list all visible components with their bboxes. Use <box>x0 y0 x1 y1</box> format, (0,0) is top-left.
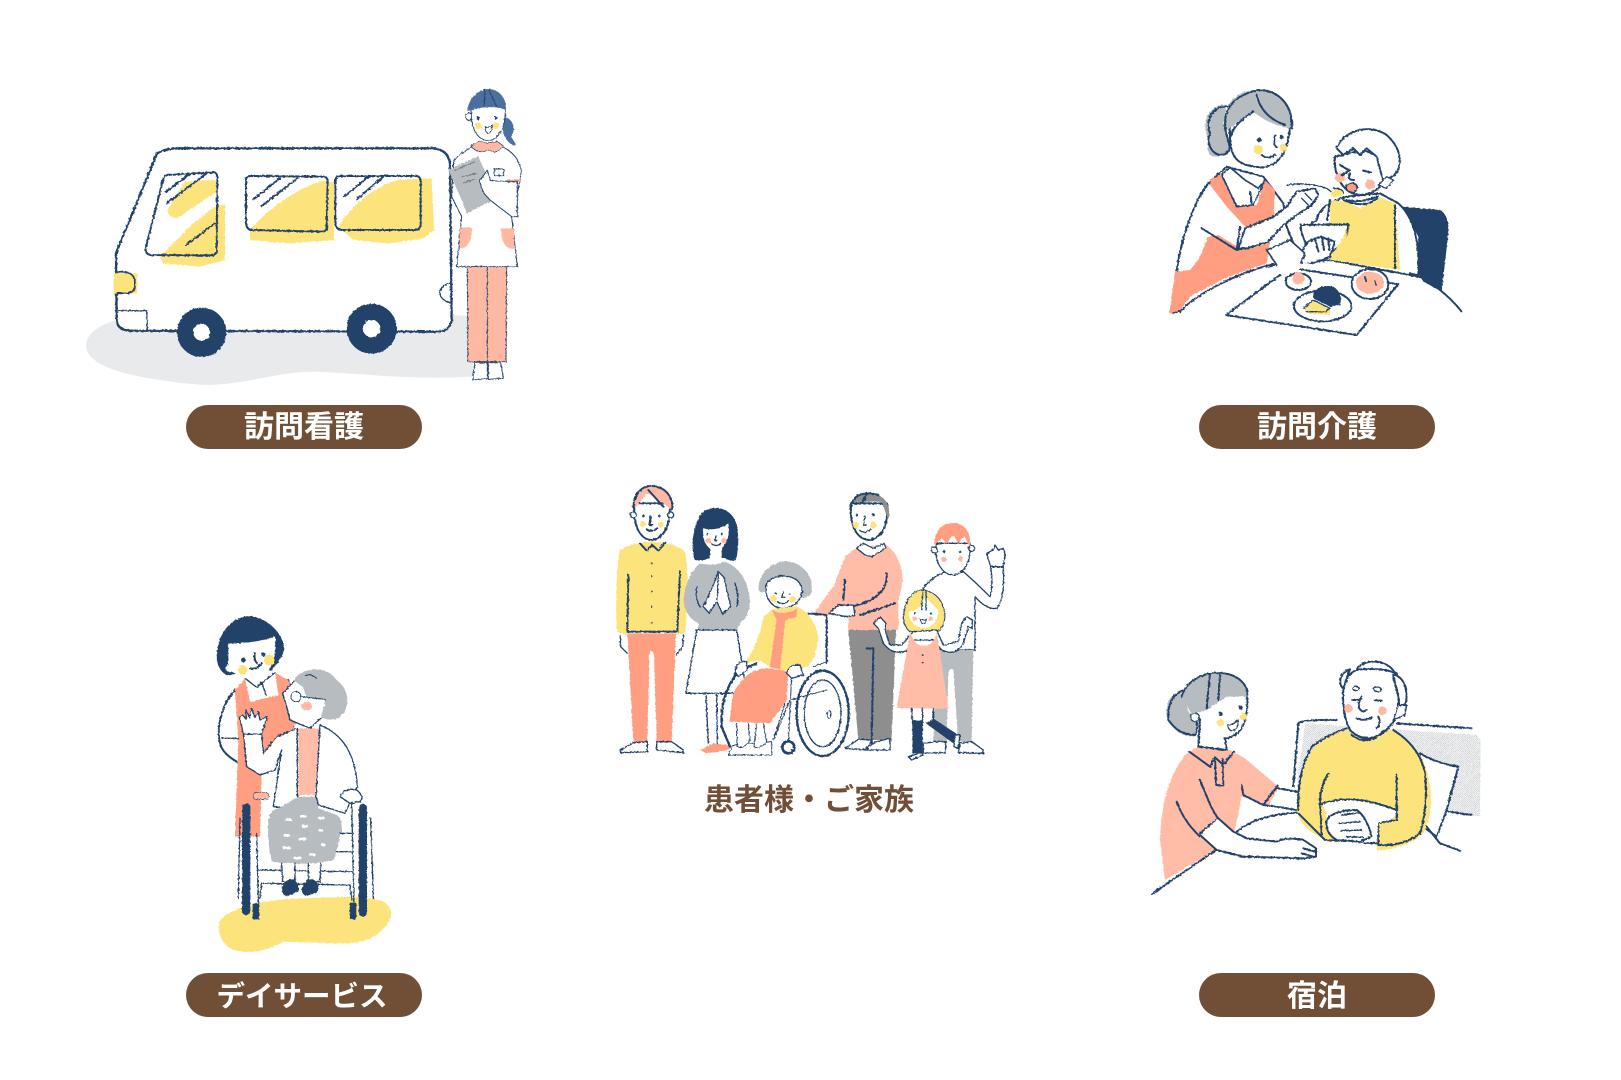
illustration: van and nurse <box>86 89 521 385</box>
yellow floor <box>219 897 391 952</box>
illustration: feeding a patient <box>1169 90 1463 335</box>
grandmother in wheelchair <box>722 562 849 756</box>
pill label <box>186 405 422 449</box>
panel: 訪問介護 <box>1169 90 1463 449</box>
caregiver <box>217 616 297 837</box>
pill label: 訪問看護 <box>244 411 364 444</box>
man in yellow shirt <box>616 486 687 753</box>
pill label <box>1199 405 1435 449</box>
illustration: overnight stay <box>1152 662 1481 894</box>
wheels <box>177 304 397 357</box>
spoon and bowl <box>1287 184 1343 197</box>
woman in grey sweater <box>683 508 750 753</box>
patient <box>1300 129 1419 277</box>
chair <box>1402 207 1448 292</box>
caregiver <box>1169 90 1318 313</box>
pill label <box>186 973 422 1017</box>
panel: 訪問看護 <box>86 89 521 449</box>
nurse <box>448 89 521 380</box>
panel: デイサービス <box>186 616 422 1017</box>
van body <box>113 148 452 332</box>
illustration: day service <box>217 616 391 952</box>
table <box>1180 263 1463 335</box>
man with wheelchair <box>813 493 903 750</box>
bed headboard <box>1293 720 1481 837</box>
patient in wheelchair <box>238 669 373 919</box>
panel: 宿泊 <box>1152 662 1481 1017</box>
pill label: デイサービス <box>216 980 388 1013</box>
pill label: 宿泊 <box>1287 980 1347 1013</box>
pill label: 訪問介護 <box>1257 411 1377 444</box>
boy waving <box>923 523 1005 753</box>
family heading: 患者様・ご家族 <box>704 783 914 817</box>
girl in pink dress <box>873 590 973 760</box>
illustration: family <box>616 486 1005 760</box>
elderly patient <box>1297 662 1460 851</box>
ground shadow <box>86 315 473 385</box>
panel: 患者様・ご家族 <box>616 486 1005 817</box>
nurse <box>1152 673 1316 894</box>
pill label <box>1199 973 1435 1017</box>
